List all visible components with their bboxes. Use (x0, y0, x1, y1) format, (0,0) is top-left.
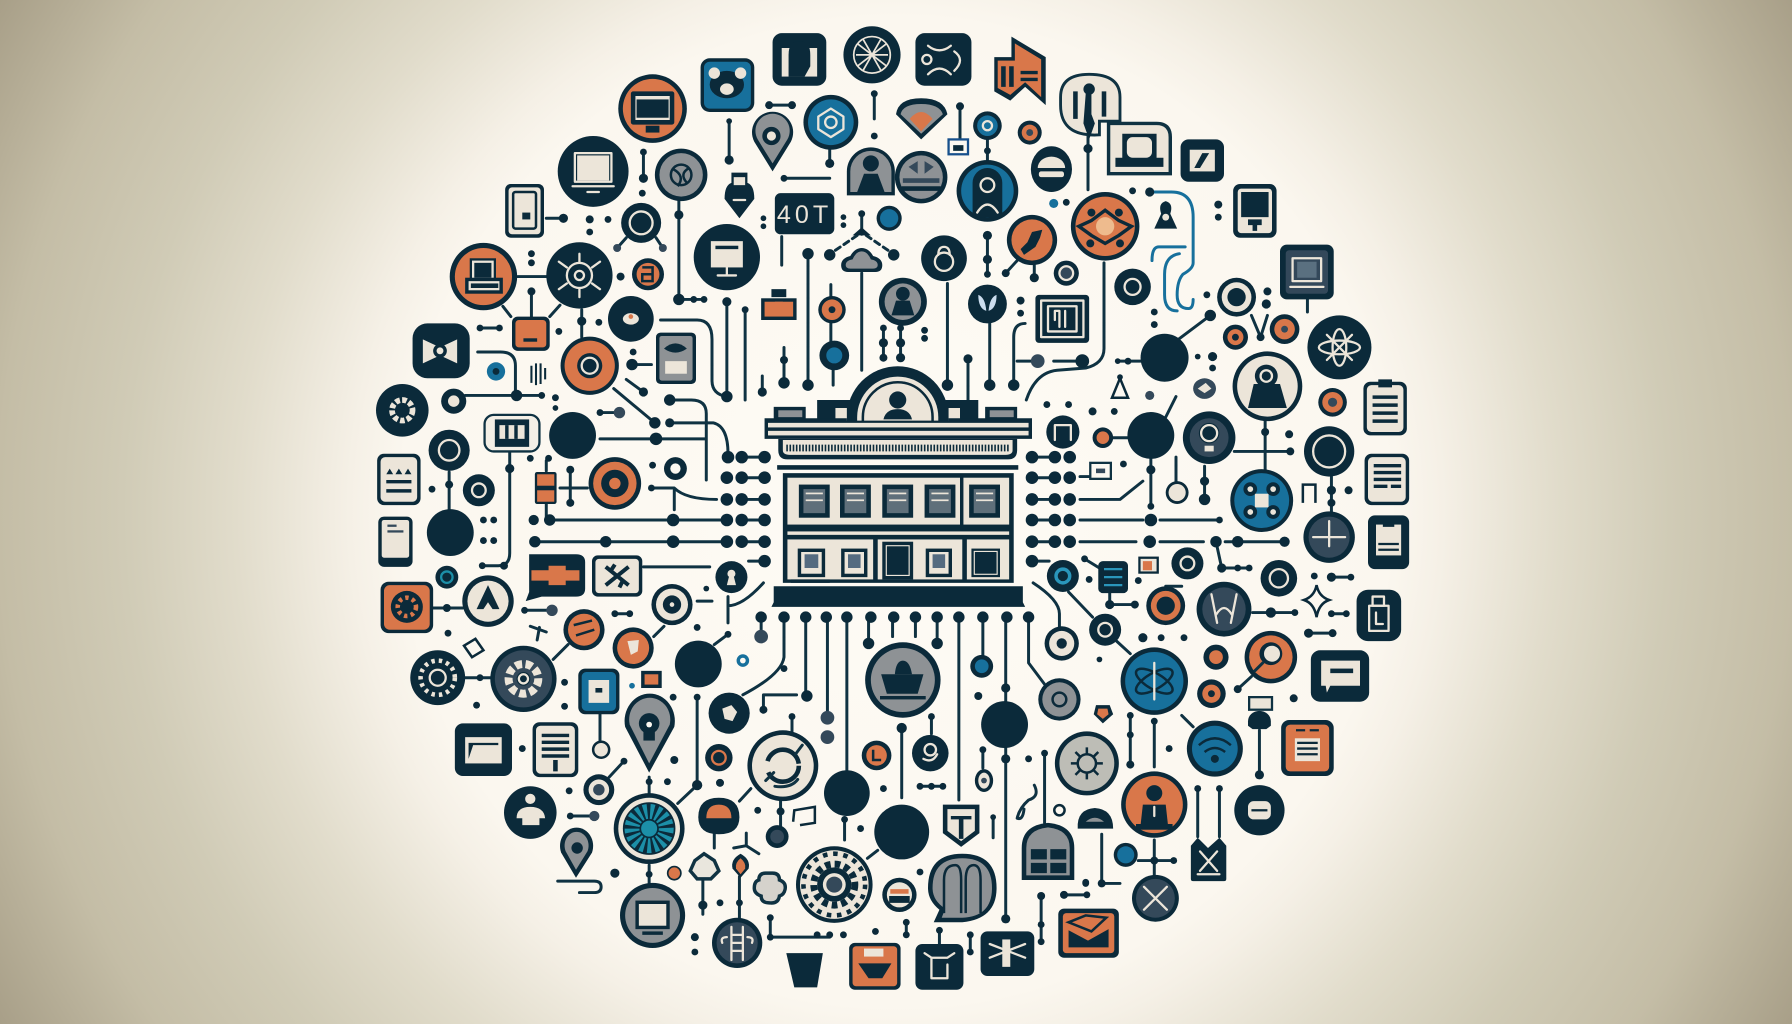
icon: gray person circle (879, 278, 927, 326)
icon: small orange ring two (1223, 325, 1248, 350)
building upper windows (799, 485, 1000, 518)
left ring icons (376, 362, 747, 712)
icon: tiny blue gear (738, 656, 747, 665)
icon: gray ship circle (865, 642, 941, 718)
icon: black ring (613, 203, 667, 252)
icon: orange ring (1270, 314, 1299, 344)
icon: blue node (970, 655, 993, 678)
icon: symbol square (981, 931, 1034, 976)
icon: blue node top (877, 206, 902, 231)
icon: music note (464, 639, 483, 657)
icon: cross dark circle (1303, 511, 1355, 563)
icon: small gray node (589, 811, 599, 821)
icon: bow tie square (413, 323, 470, 378)
icon: device card (485, 415, 539, 451)
icon: black monitor circle (558, 136, 629, 207)
icon: document (1365, 454, 1409, 505)
icon: ring dark (429, 430, 470, 471)
icon: gear black (376, 384, 429, 437)
lower right icons (912, 655, 1334, 990)
icon: orange photo square (849, 943, 901, 990)
icon: black ring two (1261, 560, 1297, 597)
icon: flower black circle (1307, 315, 1371, 379)
icon: chat square (1311, 650, 1369, 702)
icon: cloud (841, 248, 882, 272)
icon: orange dot small (667, 866, 682, 881)
icon: n badge (1046, 415, 1079, 449)
icon: gear disk (796, 846, 873, 923)
upper ring icons (413, 146, 1334, 395)
icon: gray key pin (625, 694, 675, 773)
right ring icons (1038, 314, 1409, 723)
icon: dark cup (786, 953, 823, 987)
icon: black dome (1031, 146, 1072, 192)
icon: orange monitor circle (618, 74, 687, 143)
icon: plus flower (754, 873, 785, 903)
icon: tool pick (530, 626, 546, 640)
icon: tiny picture (1138, 557, 1159, 574)
icon: blue square (578, 669, 619, 714)
icon: ring cream left (651, 584, 693, 625)
icon: teal small (435, 566, 458, 589)
icon: small orange badge two (1318, 388, 1347, 417)
icon: hub orange circle (1071, 192, 1139, 261)
icon: brain circle (843, 26, 901, 83)
icon: small circle dark (766, 825, 789, 848)
icon: small emblem (882, 878, 917, 912)
icon: teal badge (463, 474, 495, 506)
icon: list square (1098, 561, 1128, 593)
icon: ring node left (441, 389, 466, 414)
icon: blue core dot (819, 341, 849, 370)
icon: music square (793, 807, 815, 825)
icon: briefcase (761, 289, 797, 320)
icon: dark emblem (1197, 582, 1251, 637)
icon: contact square (773, 33, 826, 86)
icon: black node (981, 701, 1028, 748)
icon: orange magnifier (1245, 631, 1297, 683)
icon: black person bag (1234, 785, 1285, 835)
building cornice (765, 418, 1032, 470)
icon: teal ring (1047, 560, 1079, 592)
icon: person ring (1233, 351, 1302, 421)
icon: blue dot circle (1114, 843, 1138, 867)
icon: printer orange circle (450, 243, 517, 310)
building base (771, 586, 1025, 607)
icon: circuit square (915, 33, 971, 86)
icon: big black node (1141, 334, 1189, 382)
icon: tiny photo (641, 671, 662, 688)
icon: orange target (1146, 586, 1185, 625)
icon: small ring (1054, 261, 1079, 286)
icon: face black circle (608, 296, 654, 342)
icon: orange person circle (1121, 771, 1187, 838)
icon: blue leaf circle (968, 285, 1007, 323)
icon: black monitor circle two (694, 224, 760, 290)
icon: wheel circle (895, 151, 947, 203)
icon: blue dot (487, 362, 505, 381)
icon: gray lens (1038, 678, 1081, 721)
icon: shield (943, 805, 979, 847)
icon: pill lock (1061, 74, 1120, 139)
icon: antenna triangle (853, 227, 871, 235)
icon: orange stack (563, 609, 605, 650)
icon: small ring orange (705, 744, 733, 771)
icon: orange target left (589, 457, 641, 510)
icon: phone device (505, 184, 544, 238)
icon: x circle (1132, 875, 1179, 922)
central building (765, 366, 1032, 607)
icon: atom blue circle (1121, 647, 1188, 715)
icon: gray arch speech (928, 854, 997, 922)
icon: info card (377, 454, 421, 505)
icon: clipboard (1363, 379, 1407, 435)
icon: orange tool circle (1007, 215, 1057, 265)
icon: lock pin (725, 173, 754, 218)
bottom icons (455, 641, 941, 990)
building lower windows (798, 542, 1000, 579)
icon: window panel (1022, 823, 1074, 880)
icon: black face circle (709, 693, 750, 734)
icon: small ring node (593, 742, 609, 758)
icon: map pin (752, 112, 793, 171)
icon: large black node bottom (874, 805, 929, 859)
icon: ring lower cream (1045, 626, 1079, 661)
icon: orange square (512, 317, 550, 351)
icon: squiggle (1017, 785, 1036, 819)
icon: triangle (1112, 374, 1128, 398)
icon: gear black lower (410, 650, 465, 705)
icon: spider gray circle (1055, 731, 1119, 795)
icon: large arc ring (747, 730, 818, 801)
icon: tri node (734, 833, 759, 854)
icon: orange drop (732, 854, 749, 878)
icon: small dark gem (1193, 378, 1216, 399)
icon: gray swirl circle (655, 149, 707, 201)
icon: laptop card (1109, 123, 1170, 174)
icon: small rack (1248, 697, 1272, 729)
icon: blue robot square (701, 58, 754, 112)
icon: dark device (1233, 184, 1277, 238)
icon: ring lower (1089, 614, 1121, 646)
icon: small message box (1090, 463, 1111, 479)
icon: black node mid-left (427, 509, 474, 556)
icon: blue gear circle (803, 95, 858, 150)
icon: big black node right (1127, 412, 1174, 459)
icon: gray dome badge (896, 98, 947, 139)
icon: gray monitor circle (620, 883, 685, 948)
building facade (783, 473, 1014, 583)
icon: maze square (1035, 295, 1089, 343)
icon: padlock square (1357, 590, 1401, 641)
icon: list document (533, 722, 578, 777)
icon: small cream ring (664, 457, 687, 480)
icon: x box (1191, 838, 1226, 881)
icon: ring right (1304, 426, 1354, 477)
icon: chip (1280, 245, 1334, 299)
icon: person arch (847, 147, 895, 195)
icon: dark ring (1171, 547, 1203, 579)
icon: small orange right one (1203, 645, 1229, 670)
icon: black node bottom left (824, 770, 870, 816)
icon: cream A circle (462, 575, 514, 627)
top icons (558, 26, 1224, 207)
icon: gray eye card (656, 333, 696, 384)
icon: blue mesh circle (614, 793, 685, 864)
icon: small orange dot (818, 296, 846, 323)
icon: phone (378, 517, 413, 567)
icon: orange dome (698, 798, 739, 834)
icon: bulb dark circle (1183, 411, 1235, 464)
icon: blue drone circle (1230, 469, 1293, 532)
icon: envelope (1058, 909, 1119, 958)
icon: open book (994, 37, 1046, 105)
icon: black person circle (504, 786, 557, 839)
icon: flower outline (690, 854, 719, 879)
label: 40T: 40T (777, 201, 832, 229)
icon: black camera circle (1114, 269, 1151, 305)
icon: tiny ring (1054, 805, 1065, 815)
icon: black node lower (675, 641, 722, 687)
icon: small orange clock (862, 741, 891, 770)
connector lines (415, 94, 1351, 952)
icon: small box (949, 139, 968, 154)
icon: bracket (1303, 485, 1315, 503)
icon: blue person circle (957, 160, 1018, 222)
icon: small map pin (558, 828, 601, 893)
icon: orange grid square (381, 582, 433, 633)
icon: small ring with core (583, 774, 614, 805)
icon: small orange right two (1197, 679, 1226, 708)
icon: ring small (1166, 481, 1189, 504)
icon: ring node (1217, 278, 1256, 317)
icon: orange black node (1093, 427, 1113, 448)
icon: black node left (549, 412, 596, 459)
connector nodes (429, 90, 1354, 955)
icon: orange gem (1094, 705, 1113, 723)
icon: ladder circle (712, 918, 762, 968)
icon: small person (1154, 201, 1177, 229)
icon: gear hub circle (546, 242, 613, 309)
icon: black lock circle (921, 235, 967, 281)
icon: tool box (592, 555, 642, 597)
icon: flower dark (490, 646, 557, 712)
building dome with person (774, 366, 1017, 425)
icon: small blue circle (973, 111, 1002, 140)
icon: orange camera circle (561, 337, 619, 395)
icon: glass square (915, 944, 963, 990)
icon: wifi circle (1187, 721, 1243, 777)
icon: dark clipboard (1368, 515, 1409, 569)
icon: orange bars (535, 472, 557, 504)
icon: orange chat (526, 554, 585, 601)
icon: tiny capsule (975, 769, 993, 792)
icon: small orange badge (632, 258, 664, 290)
icon: dark circle swirl (912, 735, 949, 771)
icon: mushroom sign (1078, 808, 1113, 829)
icon: key circle (715, 561, 747, 593)
icon: orange document (1281, 720, 1334, 776)
icon: small orange ring (1018, 121, 1042, 145)
icon: dark tag square (1181, 139, 1224, 182)
label: 40T (775, 193, 834, 234)
icon: dark folder square (455, 723, 512, 776)
icon: stripe orb (531, 363, 545, 385)
icon: star (1304, 585, 1329, 617)
icon: orange leaf (613, 627, 654, 669)
